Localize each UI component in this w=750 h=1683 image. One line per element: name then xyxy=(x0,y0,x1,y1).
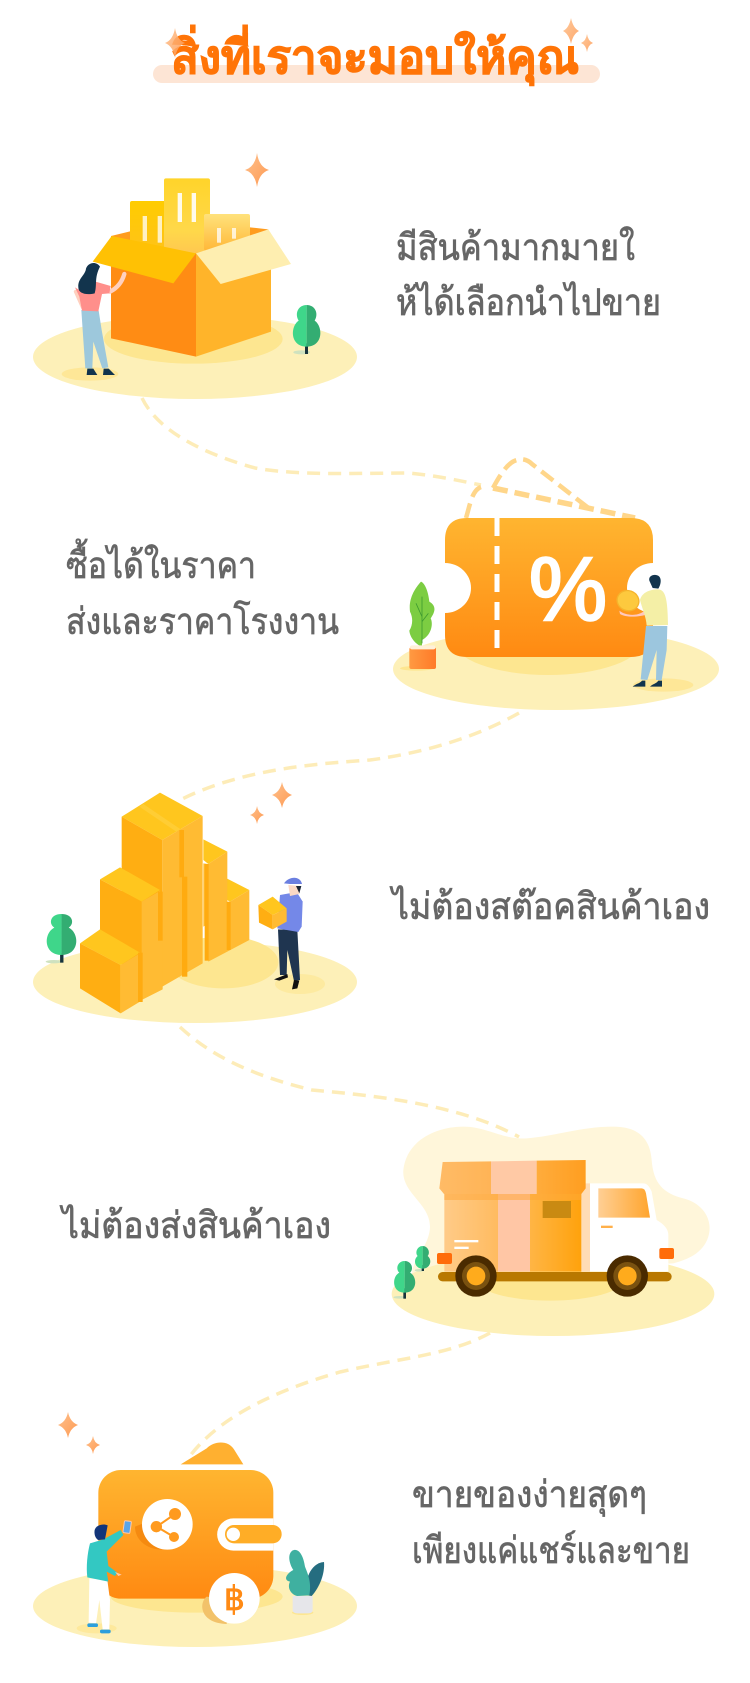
cargo body xyxy=(444,1194,581,1272)
lights xyxy=(437,1248,674,1264)
panel: wallet xyxy=(33,1412,357,1647)
title highlight band xyxy=(153,65,600,83)
ticket xyxy=(445,518,653,657)
connector dashed paths xyxy=(142,398,519,1460)
text block: item 2: ส่งและราคาโรงงาน xyxy=(66,600,339,642)
floor ellipse xyxy=(33,315,357,399)
text block: item 3: ไม่ต้องสต๊อคสินค้าเอง xyxy=(389,885,710,927)
figure: courier xyxy=(258,878,325,994)
boxes mid xyxy=(100,867,163,1000)
wallet body xyxy=(98,1470,273,1599)
boxes front xyxy=(80,929,143,1013)
illustration: boxes with courier xyxy=(80,793,325,1013)
text block: item 5: เพียงแค่แชร์และขาย xyxy=(412,1530,690,1571)
icon: sparkles xyxy=(58,1412,100,1454)
text block: item 5 xyxy=(412,1474,690,1571)
icon: title sparkles xyxy=(165,18,593,58)
cargo label xyxy=(543,1201,571,1218)
text block: item 1 xyxy=(396,226,661,323)
icon: tree xyxy=(46,914,76,963)
dashed outline of ticket stub xyxy=(466,459,635,518)
icon: sparkle xyxy=(245,153,269,187)
wallet flap xyxy=(181,1442,243,1464)
baht coin xyxy=(202,1573,260,1624)
floor ellipse xyxy=(393,628,719,710)
cab xyxy=(581,1183,668,1272)
share button xyxy=(135,1499,193,1550)
text block: item 2: ซื้อได้ในราคา xyxy=(66,538,256,586)
panel: delivery truck xyxy=(392,1127,714,1336)
panel: product box xyxy=(33,153,357,399)
speed lines xyxy=(454,1240,478,1249)
title xyxy=(153,18,600,86)
icon: small tree xyxy=(415,1246,430,1272)
cargo top xyxy=(439,1160,586,1194)
boxes tall stack xyxy=(122,793,203,987)
chassis xyxy=(438,1272,672,1281)
cab window xyxy=(598,1188,650,1218)
text block: item 1: ห้ได้เลือกนำไปขาย xyxy=(396,281,661,323)
wheel rear xyxy=(455,1255,497,1297)
wallet clasp xyxy=(217,1518,282,1551)
illustration: wallet xyxy=(77,1442,324,1633)
percent sign: % xyxy=(529,540,607,640)
icon: tree xyxy=(393,1261,415,1299)
icon: sparkles xyxy=(250,782,292,824)
ticket perforation xyxy=(494,518,500,657)
panel: stacked boxes xyxy=(33,782,357,1023)
inner floor ellipse xyxy=(453,605,643,675)
figure: man with coin xyxy=(614,575,693,692)
text block: item 4: ไม่ต้องส่งสินค้าเอง xyxy=(59,1204,331,1246)
truck xyxy=(437,1160,674,1297)
icon: potted plant xyxy=(400,582,436,671)
panel: discount ticket xyxy=(393,459,719,710)
background blob xyxy=(403,1127,710,1277)
text block: item 1: มีสินค้ามากมายใ xyxy=(396,226,635,268)
baht coin: ฿ xyxy=(224,1581,245,1618)
boxes back xyxy=(203,839,249,962)
title text: สิ่งที่เราจะมอบให้คุณ xyxy=(171,25,579,86)
icon: tree xyxy=(293,305,320,354)
floor ellipse xyxy=(33,1565,357,1647)
text block: item 5: ขายของง่ายสุดๆ xyxy=(412,1474,647,1517)
text block: item 2 xyxy=(66,538,339,642)
floor ellipse xyxy=(33,941,357,1023)
illustration: plant and man xyxy=(400,575,693,692)
floor ellipse xyxy=(392,1252,714,1336)
inner floor ellipse xyxy=(477,1259,623,1301)
wheel front xyxy=(607,1255,648,1297)
illustration: open box with woman xyxy=(62,178,320,381)
figure: woman xyxy=(62,263,124,381)
figure: man with phone xyxy=(77,1521,131,1633)
icon: teal plant xyxy=(286,1550,324,1615)
